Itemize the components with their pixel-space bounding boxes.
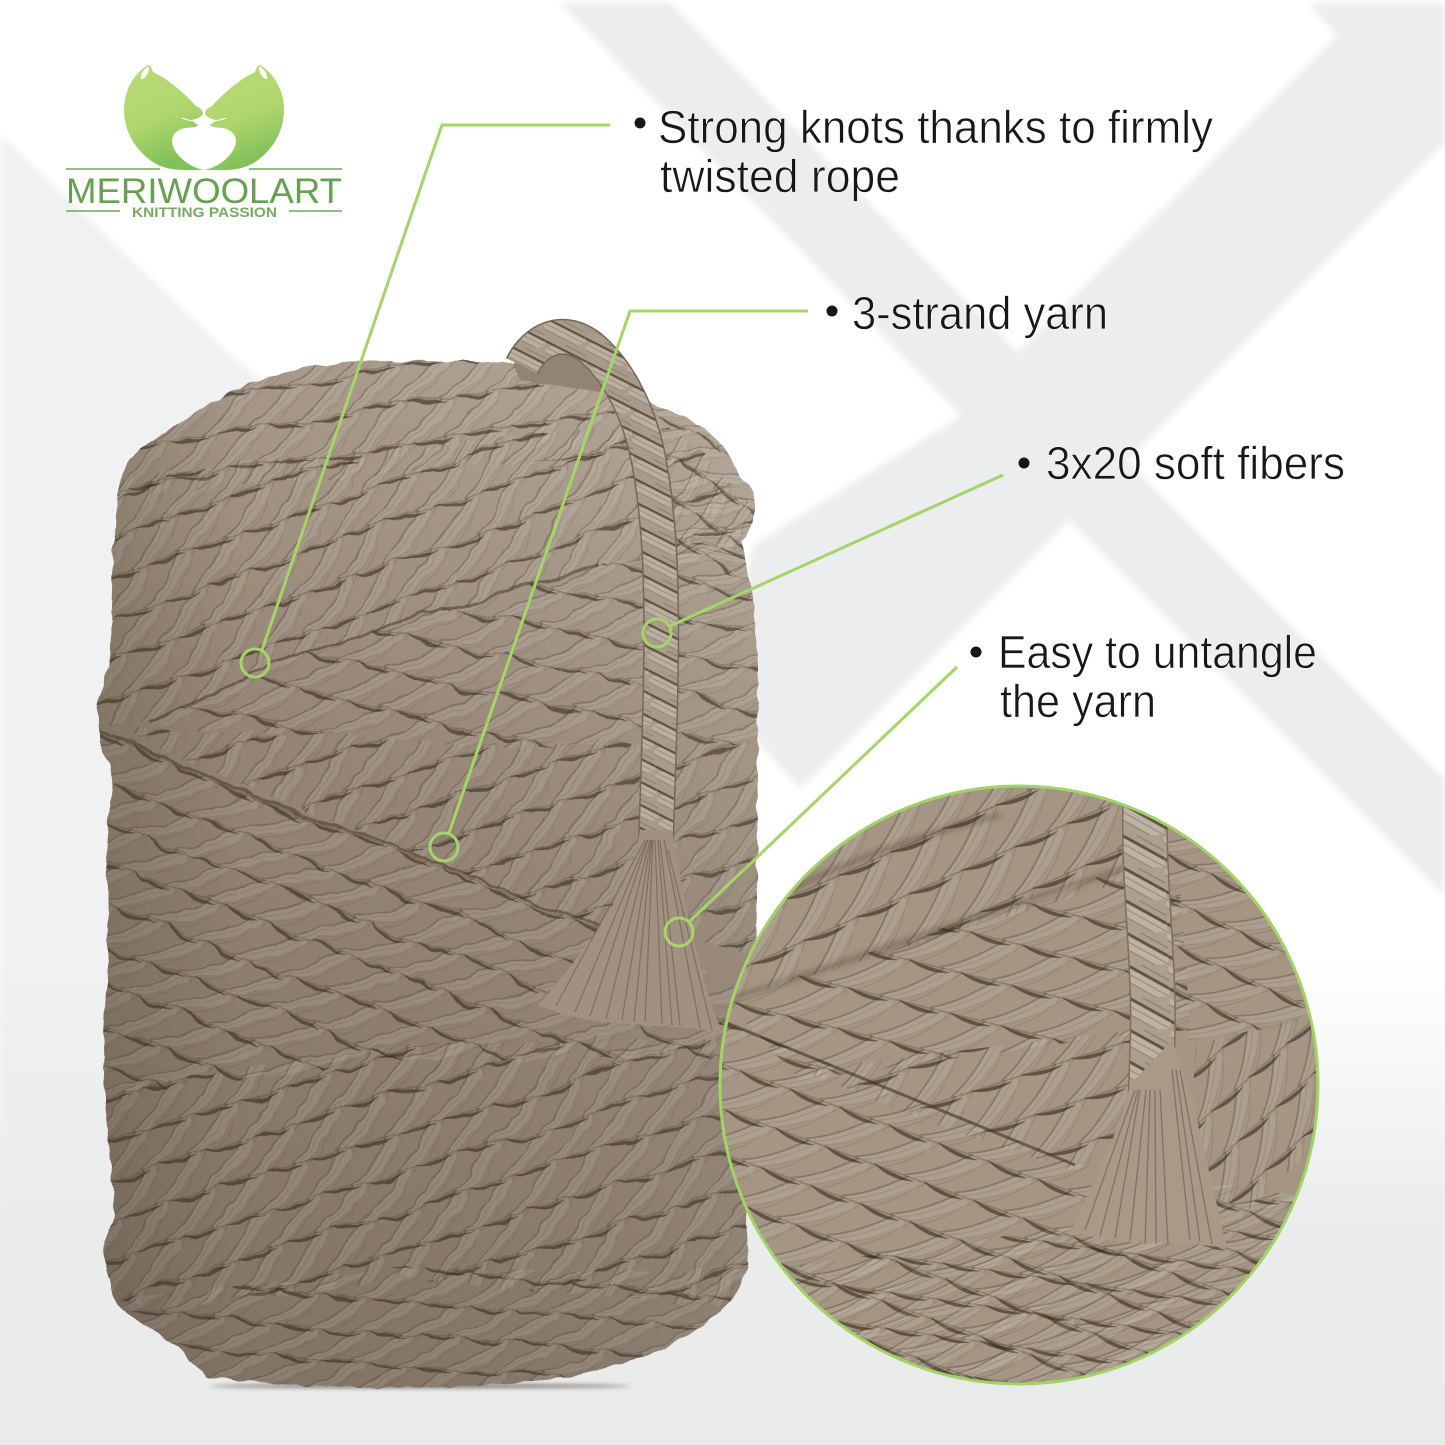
text block: strong knots: [634, 101, 1213, 202]
text block: easy to untangle: [970, 626, 1317, 727]
callout leader: soft fibers: [643, 475, 1003, 647]
text block: strong knots: twisted rope: [660, 150, 900, 202]
close-up rope tail and tassel: [1070, 790, 1227, 1248]
text block: 3x20 soft fibers: 3x20 soft fibers: [1046, 437, 1345, 489]
callout leader: untangle: [665, 667, 957, 946]
logo icon: two facing heads: [124, 65, 284, 170]
logo tagline: KNITTING PASSION: [132, 204, 277, 220]
text block: 3-strand yarn: 3-strand yarn: [852, 287, 1108, 339]
logo wordmark: MERIWOOLART: [66, 172, 342, 211]
text block: strong knots: Strong knots thanks to firmly: [658, 101, 1213, 153]
callout leader: strong knots: [241, 125, 610, 677]
text block: easy to untangle: Easy to untangle: [998, 626, 1317, 678]
panel: circular close-up of yarn: [700, 775, 1330, 1400]
hanging rope tail and tassel: [513, 330, 722, 1032]
photo: main yarn spool: [80, 320, 780, 1400]
callout leader: 3-strand yarn: [430, 311, 808, 861]
coil bands: [80, 350, 780, 1400]
logo: Meriwoolart: [66, 65, 342, 220]
text block: easy to untangle: the yarn: [1000, 675, 1156, 727]
close-up coil bands: [700, 780, 1330, 1400]
